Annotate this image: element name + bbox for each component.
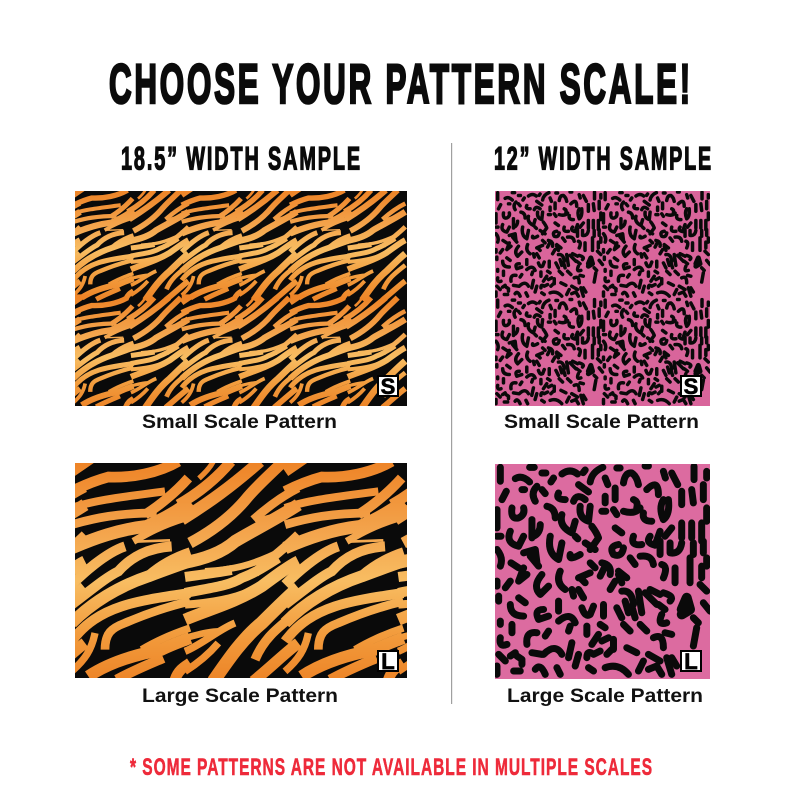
badge: S: S [381, 374, 395, 399]
label: large scale pattern, right: Large Scale Pattern [507, 685, 703, 707]
badge: L: L [684, 649, 698, 674]
label: large scale pattern, left: Large Scale Pattern [142, 685, 338, 707]
heading: 18.5 inch width sample: 18.5” WIDTH SAMPLE [121, 140, 362, 176]
badge: L [378, 649, 398, 674]
label: small scale pattern, left: Small Scale Pattern [142, 411, 337, 433]
panel: small scale leopard pattern [495, 191, 710, 406]
panel: large scale leopard pattern [495, 464, 710, 679]
panel: large scale tiger pattern [0, 460, 512, 681]
divider [451, 143, 452, 704]
label: small scale pattern, right: Small Scale Pattern [504, 411, 699, 433]
panel: small scale tiger pattern [0, 190, 407, 408]
badge: L: L [381, 649, 395, 674]
badge: L [681, 649, 701, 674]
badge: S: S [684, 374, 698, 399]
